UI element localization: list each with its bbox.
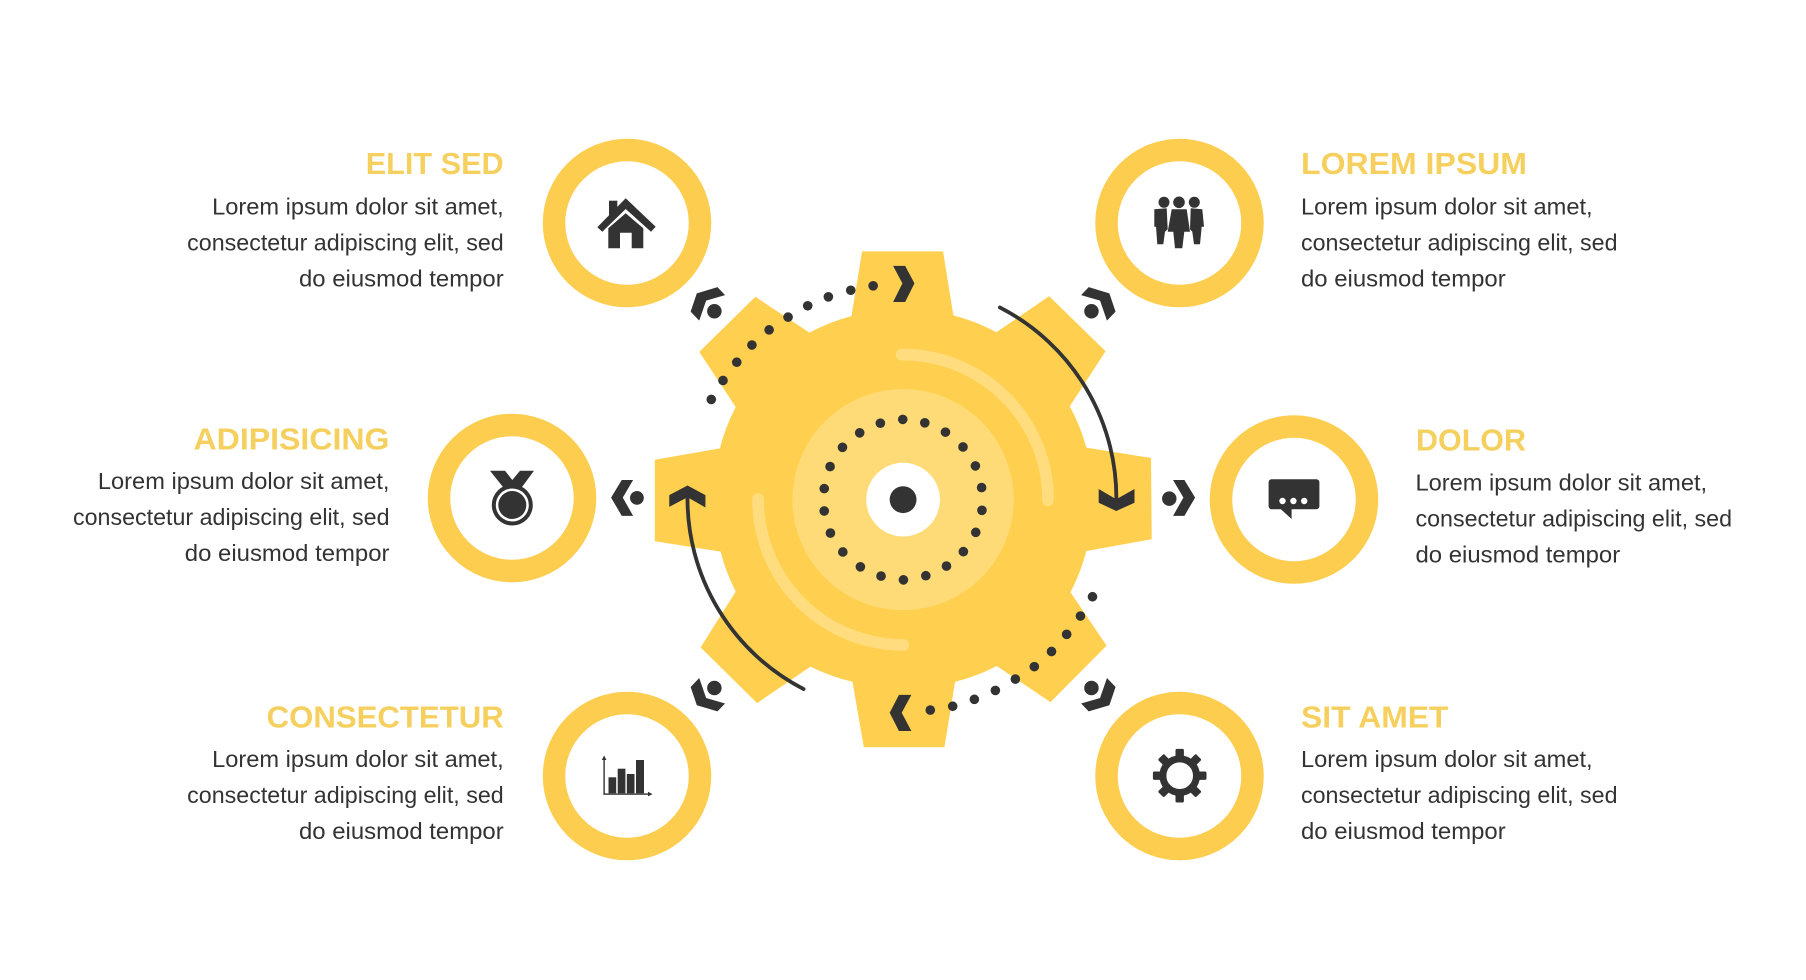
ring: sit amet xyxy=(1106,703,1252,849)
body: elit sed: do eiusmod tempor xyxy=(299,266,504,292)
text block: adipisicing xyxy=(73,421,390,566)
dotted ring around hub xyxy=(819,415,987,585)
body: dolor: consectetur adipiscing elit, sed xyxy=(1416,505,1732,531)
connector: upper right xyxy=(1081,287,1116,321)
body: sit amet xyxy=(1301,746,1618,844)
central gear diagram xyxy=(611,251,1195,747)
icon: cog xyxy=(1153,749,1206,802)
icon: medal xyxy=(490,471,534,526)
arrow: curved right xyxy=(1000,307,1135,511)
body: sit amet: do eiusmod tempor xyxy=(1301,818,1506,844)
body: lorem ipsum: Lorem ipsum dolor sit amet, xyxy=(1301,194,1593,220)
heading: adipisicing: ADIPISICING xyxy=(194,421,390,456)
ring: lorem ipsum xyxy=(1106,150,1252,296)
body: dolor: do eiusmod tempor xyxy=(1416,541,1621,567)
heading: elit sed: ELIT SED xyxy=(366,146,504,181)
body: elit sed xyxy=(187,194,504,292)
text block: sit amet xyxy=(1301,699,1618,844)
arrow: dotted top xyxy=(706,266,914,404)
text block: consectetur xyxy=(187,699,504,844)
heading: sit amet: SIT AMET xyxy=(1301,699,1449,734)
arrow: curved left xyxy=(669,486,804,689)
body: consectetur: consectetur adipiscing elit, sed xyxy=(187,782,504,808)
body: dolor xyxy=(1416,469,1732,567)
gear hub xyxy=(866,463,940,536)
body: adipisicing: Lorem ipsum dolor sit amet, xyxy=(98,468,390,494)
ring: dolor xyxy=(1221,426,1367,572)
gear body xyxy=(655,251,1152,747)
connector: lower left xyxy=(691,678,725,711)
ring: adipisicing xyxy=(439,425,585,571)
gear highlight arc upper right xyxy=(902,355,1048,500)
body: elit sed: consectetur adipiscing elit, sed xyxy=(187,230,504,256)
connector: lower right xyxy=(1081,678,1116,711)
ring: consectetur xyxy=(554,703,700,849)
body: lorem ipsum xyxy=(1301,194,1618,292)
connector: left xyxy=(611,480,644,516)
icon: house xyxy=(597,198,656,248)
body: adipisicing: do eiusmod tempor xyxy=(185,540,390,566)
text block: dolor xyxy=(1416,423,1732,567)
heading: consectetur: CONSECTETUR xyxy=(267,699,504,734)
text block: lorem ipsum xyxy=(1301,146,1618,292)
body: dolor: Lorem ipsum dolor sit amet, xyxy=(1416,469,1707,495)
body: sit amet: Lorem ipsum dolor sit amet, xyxy=(1301,746,1593,772)
body: adipisicing xyxy=(73,468,390,566)
body: consectetur: Lorem ipsum dolor sit amet, xyxy=(212,746,504,772)
icon: bar chart xyxy=(602,756,652,796)
body: consectetur xyxy=(187,746,504,844)
body: lorem ipsum: consectetur adipiscing elit, sed xyxy=(1301,230,1618,256)
gear highlight arc lower left xyxy=(758,499,903,645)
body: adipisicing: consectetur adipiscing elit, sed xyxy=(73,504,389,530)
ring: elit sed xyxy=(554,150,700,296)
icon: speech bubble xyxy=(1269,479,1319,519)
body: elit sed: Lorem ipsum dolor sit amet, xyxy=(212,194,504,220)
arrow: dotted bottom xyxy=(890,592,1097,731)
body: consectetur: do eiusmod tempor xyxy=(299,818,504,844)
heading: lorem ipsum: LOREM IPSUM xyxy=(1301,146,1527,181)
text block: elit sed xyxy=(187,146,504,292)
body: lorem ipsum: do eiusmod tempor xyxy=(1301,266,1506,292)
connector: upper left xyxy=(691,287,725,321)
body: sit amet: consectetur adipiscing elit, sed xyxy=(1301,782,1618,808)
icon: people xyxy=(1154,196,1204,248)
heading: dolor: DOLOR xyxy=(1416,423,1526,458)
gear inner disc xyxy=(793,389,1014,610)
connector: right xyxy=(1162,480,1195,516)
